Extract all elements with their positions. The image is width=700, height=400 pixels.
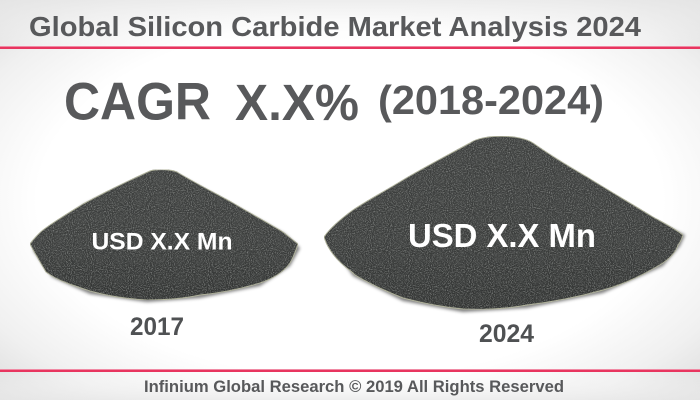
CAGR headline: X.X% [235, 74, 359, 131]
value label: 2024: USD X.X Mn [408, 218, 596, 255]
year label: 2024: 2024 [479, 320, 534, 348]
value label: 2017: USD X.X Mn [92, 228, 232, 256]
CAGR headline [64, 72, 604, 132]
footer band [0, 369, 700, 400]
CAGR headline: CAGR [64, 72, 211, 132]
silicon carbide pile: 2024 [324, 136, 685, 312]
header band [0, 0, 700, 49]
silicon carbide pile: 2017 [30, 170, 300, 302]
year label: 2017: 2017 [130, 313, 184, 341]
title: Global Silicon Carbide Market Analysis 2024 [29, 11, 641, 42]
footer text: Infinium Global Research © 2019 All Rights Reserved [144, 377, 564, 396]
CAGR headline: (2018-2024) [378, 77, 604, 123]
